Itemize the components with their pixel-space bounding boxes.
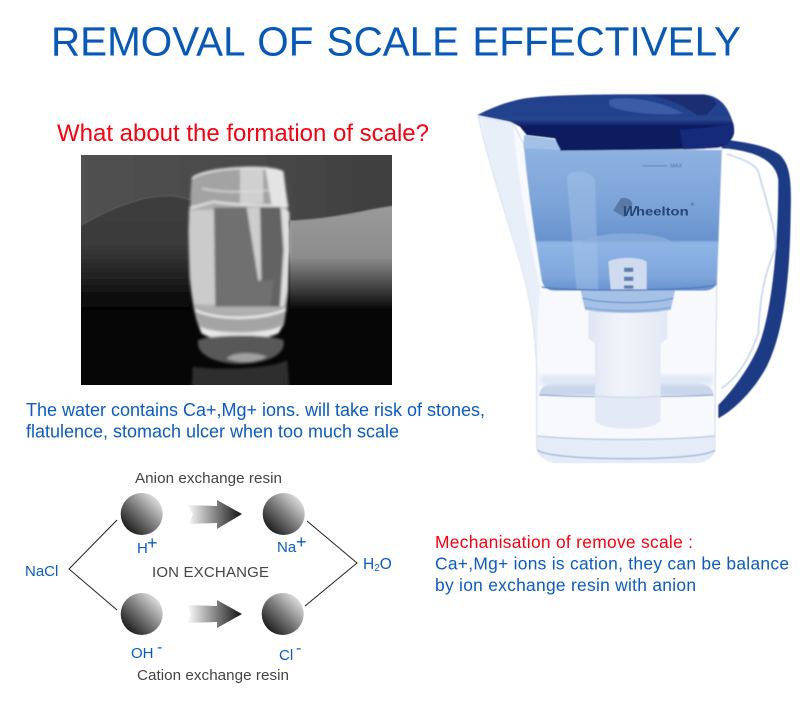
ion labels: + bbox=[147, 533, 158, 553]
water bbox=[539, 383, 713, 395]
ion labels: H bbox=[363, 556, 374, 573]
ion labels: Cl bbox=[279, 647, 293, 664]
body text: risks of scale bbox=[26, 400, 485, 442]
title: REMOVAL OF SCALE EFFECTIVELY bbox=[51, 18, 741, 64]
mechanism text: Ca+,Mg+ ions is cation, they can be balance bbox=[435, 554, 789, 574]
label: anion exchange resin: Anion exchange resin bbox=[135, 470, 282, 487]
label: ion exchange: ION EXCHANGE bbox=[152, 564, 269, 581]
logo: Wheelton: ® bbox=[691, 201, 695, 207]
body text: risks of scale: flatulence, stomach ulcer when too much scale bbox=[26, 422, 399, 442]
photo: glass of water bbox=[77, 152, 397, 387]
filter cartridge bbox=[588, 312, 667, 429]
lid bbox=[477, 94, 734, 151]
arrow: top bbox=[187, 500, 242, 529]
mechanism text: by ion exchange resin with anion bbox=[435, 575, 696, 595]
ion labels: + bbox=[296, 532, 307, 552]
product: water filter jug: MAX bbox=[670, 164, 682, 170]
tank bbox=[524, 148, 722, 291]
ion labels: H bbox=[137, 540, 148, 557]
ion labels: O bbox=[380, 556, 392, 573]
label: cation exchange resin: Cation exchange resin bbox=[137, 667, 289, 684]
ion labels: Na bbox=[277, 539, 297, 556]
connector lines bbox=[69, 520, 357, 610]
ion labels: 2 bbox=[374, 563, 380, 574]
product: water filter jug bbox=[477, 94, 791, 462]
arrow: bottom bbox=[187, 600, 242, 628]
logo: Wheelton bbox=[613, 198, 695, 220]
filter top bbox=[608, 258, 647, 289]
glass bbox=[188, 167, 290, 387]
ion labels bbox=[25, 532, 392, 664]
body text: risks of scale: The water contains Ca+,Mg+ ions. will take risk of stones, bbox=[26, 400, 485, 420]
ion labels: - bbox=[296, 640, 301, 657]
ion labels: NaCl bbox=[25, 563, 58, 580]
logo: Wheelton: heelton bbox=[636, 204, 689, 218]
resin balls bbox=[121, 493, 305, 635]
diagram: ion exchange bbox=[25, 470, 392, 684]
mechanism text bbox=[435, 532, 789, 595]
ion labels: - bbox=[157, 639, 162, 656]
heading: formation of scale: What about the formation of scale? bbox=[57, 120, 429, 147]
mechanism text: Mechanisation of remove scale : bbox=[435, 532, 693, 552]
handle bbox=[718, 139, 791, 418]
tank label bbox=[643, 164, 667, 167]
logo: Wheelton: W bbox=[623, 204, 638, 220]
jug body bbox=[478, 117, 722, 462]
ion labels: OH bbox=[131, 645, 154, 662]
